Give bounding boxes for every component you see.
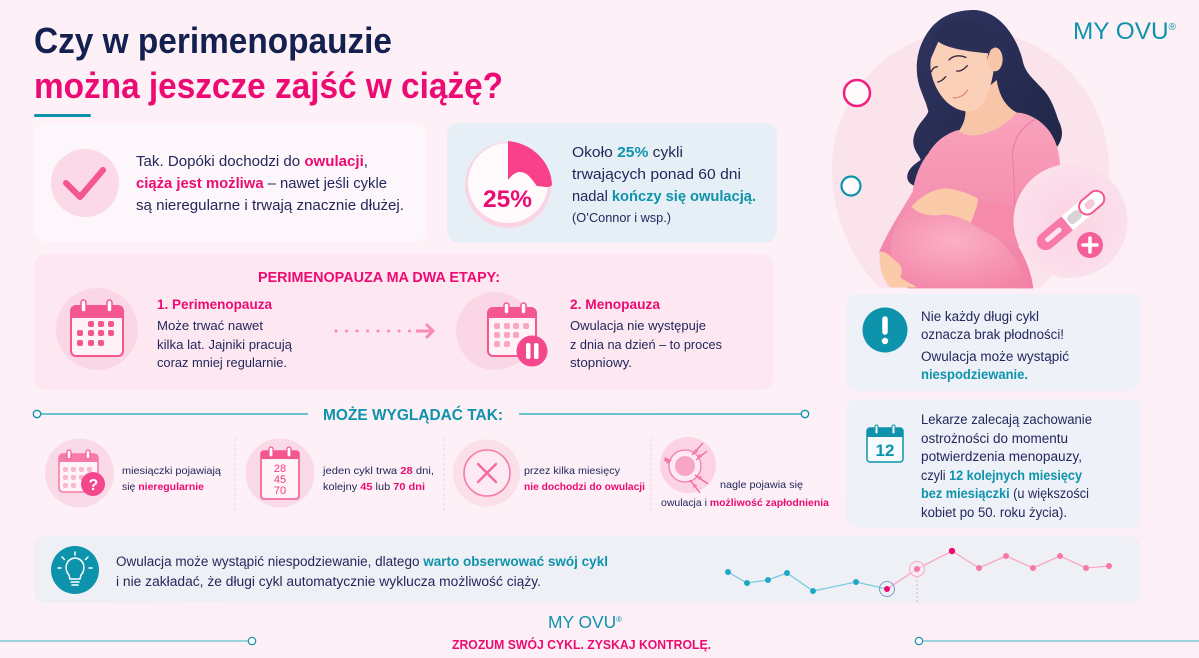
sweater [879, 113, 1060, 288]
symptom row [45, 437, 829, 512]
statistic text: trwających ponad 60 dni [572, 167, 741, 183]
face [930, 38, 994, 111]
background circle [832, 30, 1109, 288]
symptom 4 text: owulacja i możliwość zapłodnienia [661, 497, 829, 509]
decorative ring teal [842, 176, 860, 196]
answer text [136, 154, 404, 214]
belly [891, 210, 1030, 288]
statistic text [572, 145, 756, 225]
lower hand [880, 252, 917, 287]
woman figure [879, 10, 1062, 288]
illustration: pregnant woman [832, 10, 1128, 288]
symptom 4 text [661, 479, 829, 509]
panel: 25 percent statistic [447, 123, 777, 243]
recommendation text [921, 412, 1092, 520]
pie chart 25%: 25% [483, 186, 532, 213]
icon: calendar with 28 45 70: 45 [274, 474, 286, 486]
stage 1 text: kilka lat. Jajniki pracują [157, 337, 293, 352]
tip text: Owulacja może wystąpić niespodziewanie, dlatego warto obserwować swój cykl [116, 554, 608, 569]
decorative ring pink [844, 80, 870, 106]
stage 1 text: Może trwać nawet [157, 318, 263, 333]
recommendation text: kobiet po 50. roku życia). [921, 505, 1067, 520]
answer text: Tak. Dopóki dochodzi do owulacji, [136, 154, 368, 170]
panel: doctors recommendation [846, 399, 1141, 528]
icon: calendar with 28 45 70: 28 [274, 463, 286, 475]
stage 2 text: z dnia na dzień – to proces [570, 337, 722, 352]
warning text [921, 309, 1069, 382]
icon: check mark [51, 149, 119, 217]
neck [958, 80, 1018, 136]
heading: may look like this: MOŻE WYGLĄDAĆ TAK: [323, 405, 503, 424]
icon: calendar with pause [456, 292, 548, 370]
recommendation text: Lekarze zalecają zachowanie [921, 412, 1092, 427]
tip text: i nie zakładać, że długi cykl automatycznie wyklucza możliwość ciąży. [116, 574, 541, 589]
hair [907, 10, 1062, 186]
panel: answer yes [34, 123, 427, 242]
arrow: stage 1 to stage 2 [336, 324, 433, 338]
sleeve cuff [971, 199, 1020, 247]
recommendation text: bez miesiączki (u większości [921, 486, 1089, 501]
panel: fertility warning [846, 294, 1141, 391]
recommendation text: potwierdzenia menopauzy, [921, 449, 1082, 464]
warning text: oznacza brak płodności! [921, 327, 1064, 342]
pie chart 25% [465, 141, 552, 228]
recommendation text: czyli 12 kolejnych miesięcy [921, 468, 1082, 483]
heading: two stages: PERIMENOPAUZA MA DWA ETAPY: [258, 270, 500, 286]
warning text: Owulacja może wystąpić [921, 349, 1069, 364]
footer tagline: ZROZUM SWÓJ CYKL. ZYSKAJ KONTROLĘ. [452, 637, 711, 652]
symptom 4 text: nagle pojawia się [720, 479, 803, 491]
statistic text: Około 25% cykli [572, 145, 683, 161]
icon: calendar with question mark: ? [88, 477, 98, 494]
icon: egg and sperm [660, 437, 716, 493]
icon: calendar 12: 12 [876, 441, 894, 460]
answer text: ciąża jest możliwa – nawet jeśli cykle [136, 176, 387, 192]
upper hand [912, 188, 978, 223]
icon: calendar with 28 45 70: 70 [274, 485, 286, 497]
title: można jeszcze zajść w ciążę? [34, 65, 503, 106]
icon: light bulb [51, 546, 99, 594]
logo: ® [1169, 22, 1177, 33]
icon: calendar with 28 45 70 [246, 438, 314, 508]
warning text: Nie każdy długi cykl [921, 309, 1039, 324]
warning text: niespodziewanie. [921, 367, 1028, 382]
eyes and smile [931, 56, 968, 98]
stage 2 text: stopniowy. [570, 355, 632, 370]
symptom 2 text [322, 465, 434, 493]
symptom 3 text: nie dochodzi do owulacji [524, 481, 645, 493]
heading: may look like this [33, 405, 809, 424]
answer text: są nieregularne i trwają znacznie dłużej. [136, 198, 404, 214]
symptom 1 text: miesiączki pojawiają [122, 465, 221, 477]
icon: cross in circle [453, 440, 520, 506]
stage 1 text [157, 296, 293, 370]
symptom 3 text [524, 465, 645, 493]
pregnancy test circle [1014, 164, 1128, 278]
statistic text: (O’Connor i wsp.) [572, 211, 671, 225]
symptom 2 text: jeden cykl trwa 28 dni, [322, 465, 434, 477]
ear [987, 47, 1003, 71]
title: Czy w perimenopauzie [34, 20, 392, 61]
tip text [116, 554, 608, 589]
symptom 3 text: przez kilka miesięcy [524, 465, 621, 477]
stage 1 text: 1. Perimenopauza [157, 296, 272, 312]
sleeve seam [1013, 119, 1035, 207]
symptom 1 text: się nieregularnie [122, 481, 204, 493]
symptom 1 text [122, 465, 221, 493]
recommendation text: ostrożności do momentu [921, 431, 1068, 446]
panel: observation tip [34, 536, 1140, 603]
symptom: sudden ovulation [660, 437, 829, 509]
line chart: cycle temperature [725, 548, 1112, 603]
stage 1 text: coraz mniej regularnie. [157, 355, 287, 370]
stage 2 text: Owulacja nie występuje [570, 318, 706, 333]
statistic text: nadal kończy się owulacją. [572, 189, 756, 205]
icon: calendar with question mark [45, 438, 114, 508]
hair fringe [930, 18, 1004, 60]
icon: calendar 12 [867, 425, 903, 462]
symptom 2 text: kolejny 45 lub 70 dni [323, 481, 425, 493]
stage 2 text: 2. Menopauza [570, 296, 660, 312]
footer logo: ® [616, 615, 622, 624]
symptom: no ovulation [453, 440, 645, 506]
footer [0, 612, 1199, 652]
title [34, 20, 503, 117]
stage 2 text [570, 296, 722, 370]
symptom: varying cycle length [246, 438, 434, 508]
panel: two stages [34, 254, 773, 390]
icon: exclamation mark [862, 308, 908, 352]
icon: calendar [56, 288, 138, 370]
logo: MY OVU [1073, 18, 1167, 45]
symptom: irregular periods [45, 438, 221, 508]
footer logo: MY OVU [548, 612, 617, 632]
